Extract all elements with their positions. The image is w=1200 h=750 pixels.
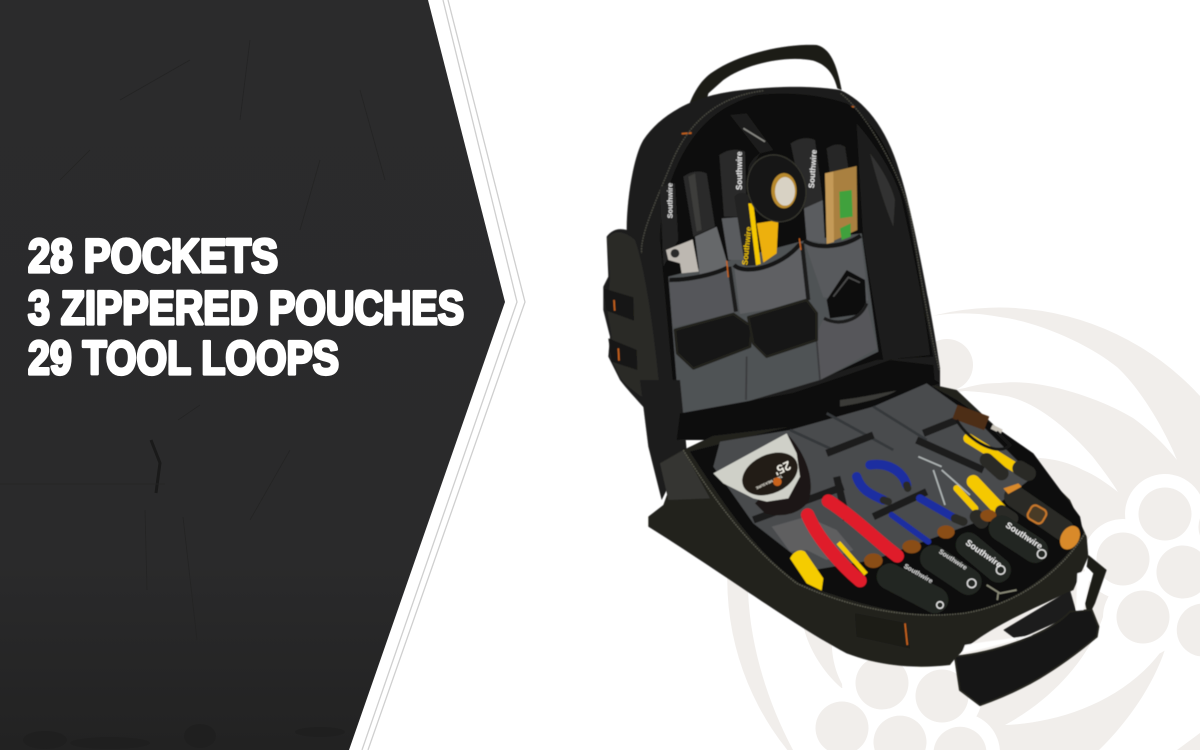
torpedo level: [825, 166, 857, 244]
tape measure: 25': [772, 458, 793, 478]
screwdriver 1: Southwire: [902, 563, 934, 585]
yellow accent: [838, 543, 866, 574]
gray organizer panel: [668, 233, 878, 423]
screwdriver bits: [864, 510, 996, 568]
screwdriver 2: Southwire: [937, 548, 968, 572]
lower half: open front compartment: [640, 370, 1107, 705]
yellow and black tool: Southwire: [740, 226, 753, 266]
interior lining: [660, 93, 933, 423]
keychain strap: [730, 113, 773, 153]
screwdriver left: [660, 183, 678, 267]
gray tool roll: [713, 383, 1033, 570]
side straps: [603, 288, 637, 370]
lower gray seams: [746, 340, 820, 400]
glossy divider band: [677, 370, 940, 440]
screwdriver fourth: [791, 138, 825, 243]
small lower pocket: [817, 303, 877, 380]
red pliers: [808, 501, 897, 581]
hinge gray patch: [660, 450, 710, 500]
yellow and black tool: [734, 193, 761, 266]
upper pockets: [669, 236, 868, 327]
headline: feature counts: [28, 229, 464, 384]
side strap: [1085, 555, 1107, 617]
utility knife: [666, 239, 699, 273]
screwdriver third: [719, 150, 748, 260]
top carry handle: [683, 45, 842, 127]
hex end marks: [937, 550, 1046, 608]
backpack photo illustration: [603, 45, 1107, 705]
yellow tool tip: [790, 550, 823, 591]
strap opening: [1076, 570, 1091, 611]
screwdriver with orange cap: [1003, 483, 1084, 553]
headline: feature counts: 29 TOOL LOOPS: [28, 331, 339, 384]
bottom grab handle: [955, 610, 1098, 705]
dark chevron panel: [0, 0, 505, 750]
inspection light: [955, 412, 1010, 449]
background swirl emblem: [727, 308, 1200, 750]
gray pouch behind pliers: [772, 517, 853, 560]
screwdriver second: [683, 171, 728, 277]
orange accents: [614, 107, 855, 361]
outer shell: [603, 87, 940, 440]
clip hook: [987, 585, 1017, 600]
pocket clip tool: [827, 270, 867, 318]
yellow block: [757, 220, 778, 263]
headline: feature counts: 3 ZIPPERED POUCHES: [28, 281, 464, 334]
tape measure: TAPE MEASURE: [755, 474, 783, 490]
screwdriver fifth: [827, 145, 848, 175]
wire connector tester: [918, 457, 970, 505]
velcro strap and orange tab: [855, 613, 910, 648]
front shell: [648, 383, 1088, 667]
screwdriver 2: [933, 548, 968, 582]
zippers: [642, 91, 939, 370]
elastic loops: [753, 420, 983, 520]
left side bridge: [640, 380, 687, 500]
gap under the handle: [962, 635, 1033, 653]
yellow handled tools: [957, 438, 1028, 522]
screwdriver third: Southwire: [735, 151, 744, 190]
upper half: back panel with pockets: [603, 45, 940, 440]
side pouch: [607, 232, 662, 410]
screwdriver fourth: Southwire: [807, 149, 819, 188]
screwdriver 4: Southwire: [1004, 520, 1045, 551]
screwdriver 1: [890, 563, 935, 600]
interior floor: [690, 383, 1083, 615]
right lining panel: [857, 123, 930, 360]
screwdriver left: Southwire: [666, 183, 675, 218]
pocket flap center: [748, 300, 817, 357]
front zipper: [683, 450, 1085, 615]
headline: feature counts: 28 POCKETS: [28, 229, 278, 282]
rear base piece: [1003, 590, 1077, 640]
screwdriver 3: Southwire: [964, 537, 1004, 570]
chevron outline strokes: [362, 0, 525, 750]
bottom band of back panel: [678, 360, 940, 440]
blue pliers: [857, 464, 963, 542]
tape measure: [713, 433, 811, 515]
pocket flap left: [675, 314, 752, 368]
electrical tape roll: [738, 147, 815, 230]
